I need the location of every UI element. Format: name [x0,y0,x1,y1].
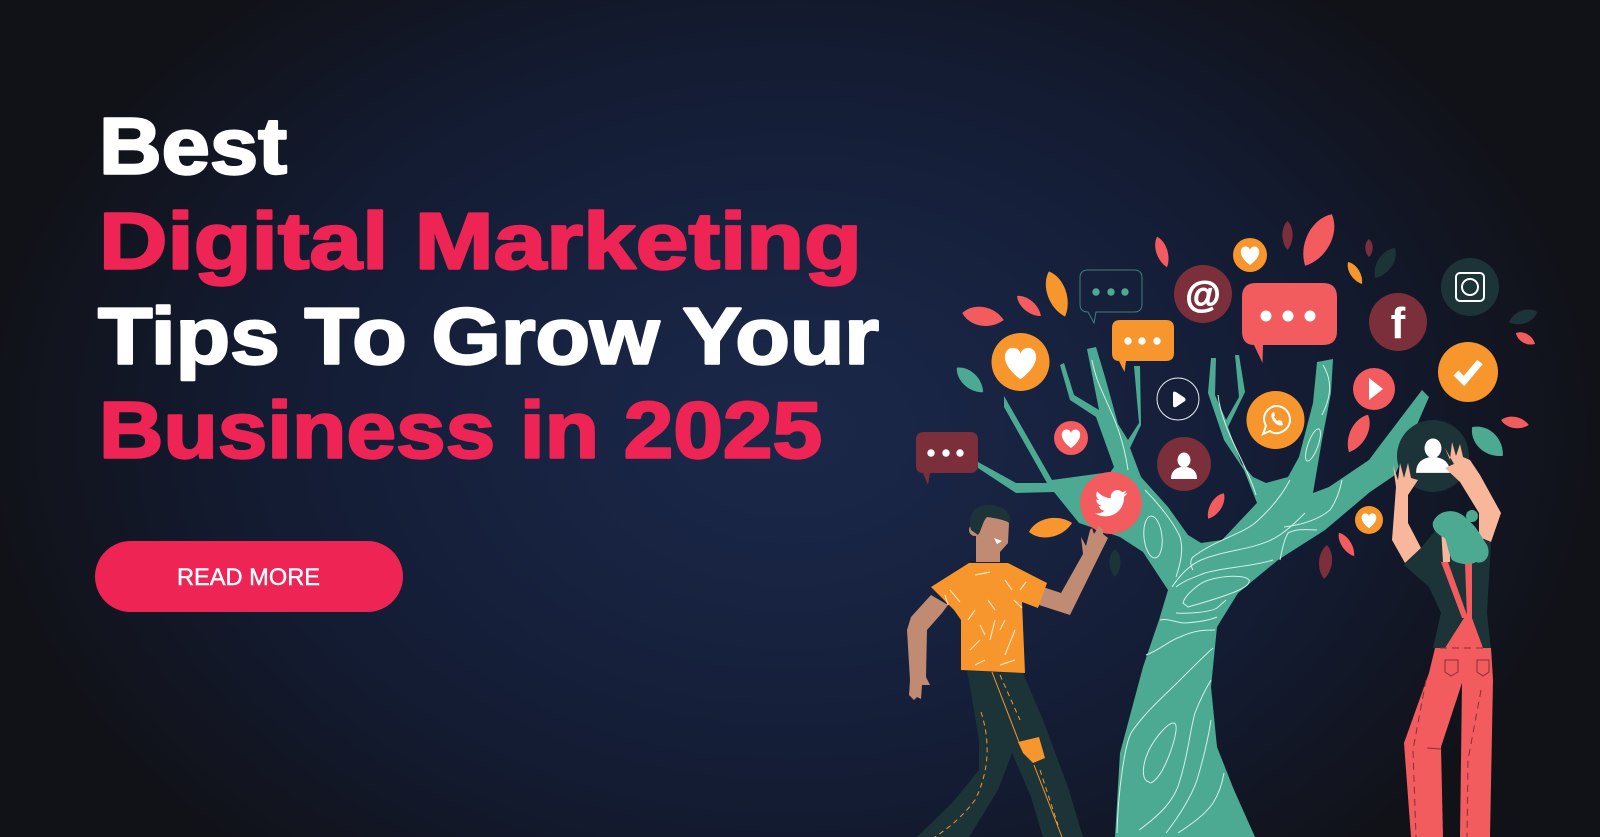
icon: at sign: @ [1185,274,1221,315]
icon: orange heart [992,333,1050,391]
icon: outline speech bubble [1080,270,1142,323]
icon: coral heart [1054,421,1088,455]
title line: Tips To Grow Your: Tips To Grow Your [98,292,879,380]
icon: play [1353,368,1395,410]
icon: whatsapp [1246,391,1304,449]
icon: top small heart [1233,238,1267,272]
button: read more: READ MORE [177,564,320,591]
icon: twitter [1080,472,1142,534]
icon: check [1438,342,1498,402]
icon: facebook: f [1391,299,1406,348]
woman [1392,442,1501,837]
tree grain [1092,360,1342,833]
icon: orange speech bubble [1112,320,1174,372]
leaves [952,209,1539,580]
title [98,102,879,474]
icon: instagram [1441,258,1499,316]
icon: person [1157,437,1211,491]
icon: dark speech bubble [916,432,978,485]
icon: small orange heart [1355,506,1383,534]
icon: dark person badge [1397,420,1469,492]
tree [978,347,1429,837]
icon: facebook [1369,293,1427,351]
title line: Digital Marketing: Digital Marketing [99,196,862,286]
man [907,505,1108,837]
title line: Best: Best [99,102,287,190]
button: read more [95,541,403,612]
icon: at sign [1174,265,1232,323]
icon: coral speech bubble [1242,283,1337,363]
title line: Business in 2025: Business in 2025 [99,386,822,474]
icon: outline play [1157,378,1199,420]
